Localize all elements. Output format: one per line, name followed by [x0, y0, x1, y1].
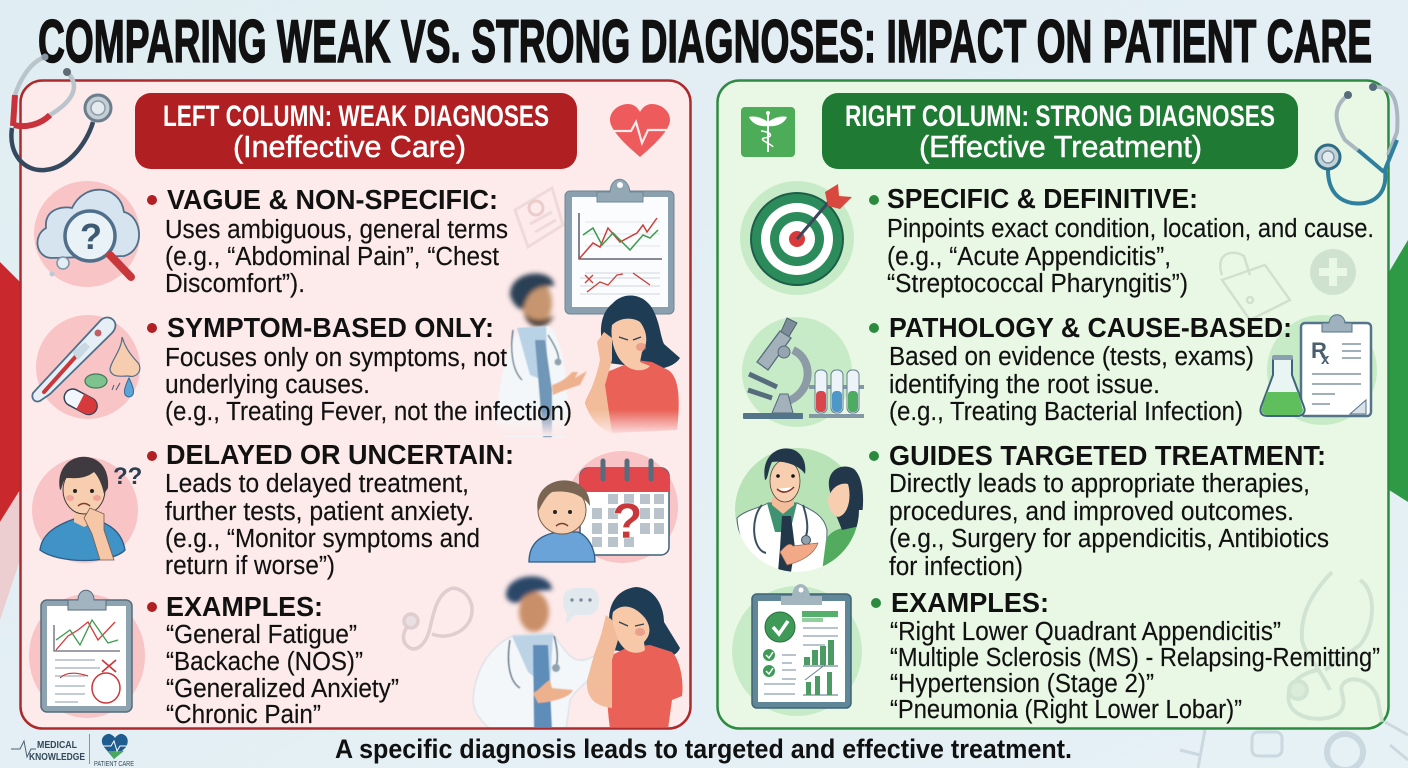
bullet: delayed or uncertain: return if worse”) — [165, 552, 335, 580]
bullet: vague and non-specific — [147, 184, 508, 298]
bullet: symptom-based only: SYMPTOM-BASED ONLY: — [167, 312, 494, 343]
icon: clipboard with marked charts — [29, 590, 145, 718]
bullet: symptom-based only: underlying causes. — [165, 371, 370, 399]
footer takeaway: A specific diagnosis leads to targeted and effective treatment. — [335, 734, 1072, 764]
icon: faint document — [515, 188, 563, 247]
bullet: guides targeted treatment: procedures, and improved outcomes. — [889, 498, 1294, 526]
header: strong diagnoses — [822, 93, 1298, 169]
icon: microscope and test tubes — [742, 317, 864, 427]
icon: worried boy with calendar — [529, 451, 678, 563]
bullet: strong examples: “Hypertension (Stage 2)” — [890, 670, 1154, 698]
logo: medical knowledge: MEDICAL — [37, 739, 77, 751]
panel: weak diagnoses — [20, 80, 690, 729]
bullet: specific and definitive: “Streptococcal Pharyngitis”) — [887, 270, 1188, 298]
bullet: specific and definitive: (e.g., “Acute Appendicitis”, — [887, 243, 1171, 271]
icon: stethoscope, top left — [11, 54, 111, 170]
illustration: blurred doctor with patient, lower — [473, 576, 683, 729]
header: weak diagnoses: (Ineffective Care) — [233, 130, 466, 164]
panel: strong diagnoses — [718, 80, 1397, 728]
icon: thermometer, nose and pills — [32, 315, 140, 419]
icon: clipboard with charts — [565, 179, 674, 314]
bullet: weak examples: EXAMPLES: — [166, 591, 323, 622]
header: weak diagnoses: LEFT COLUMN: WEAK DIAGNOSES — [163, 100, 549, 133]
header: weak diagnoses — [135, 93, 577, 169]
icon: cloud with magnifier — [34, 181, 140, 287]
icon: target and arrow — [740, 181, 854, 295]
bullet: pathology and cause-based: identifying the root issue. — [889, 371, 1160, 399]
bullet: strong examples — [871, 587, 1380, 724]
bullet: delayed or uncertain: Leads to delayed treatment, — [165, 470, 469, 498]
icon: faint lock and plus — [1220, 249, 1356, 320]
bullet: symptom-based only: Focuses only on symptoms, not — [165, 344, 507, 372]
bullet: specific and definitive: Pinpoints exact condition, location, and cause. — [887, 215, 1374, 243]
bullet: vague and non-specific: Uses ambiguous, general terms — [165, 216, 508, 244]
icon: caduceus — [741, 107, 795, 157]
icon: prescription clipboard and flask — [1260, 315, 1377, 425]
bullet: delayed or uncertain: DELAYED OR UNCERTAIN: — [166, 439, 514, 470]
bullet: strong examples: “Right Lower Quadrant Appendicitis” — [890, 618, 1281, 646]
bullet: symptom-based only — [147, 312, 572, 426]
bullet: guides targeted treatment: GUIDES TARGETED TREATMENT: — [889, 440, 1326, 471]
bullet: guides targeted treatment — [869, 440, 1329, 581]
bullet: delayed or uncertain — [147, 439, 514, 580]
icon: faint stethoscope — [403, 588, 472, 649]
logo: medical knowledge: KNOWLEDGE — [29, 751, 85, 763]
bullet: pathology and cause-based: PATHOLOGY & CAUSE-BASED: — [889, 312, 1292, 343]
bullet: delayed or uncertain: (e.g., “Monitor symptoms and — [165, 525, 480, 553]
bullet: pathology and cause-based — [869, 312, 1292, 426]
header: strong diagnoses: RIGHT COLUMN: STRONG DIAGNOSES — [845, 100, 1275, 133]
bullet: strong examples: EXAMPLES: — [891, 587, 1049, 618]
bullet: specific and definitive — [869, 183, 1374, 298]
bullet: guides targeted treatment: for infection) — [889, 553, 1023, 581]
icon: confused boy: ?? — [113, 463, 142, 490]
bullet: weak examples: “Chronic Pain” — [166, 701, 321, 729]
icon: prescription clipboard and flask: x — [1321, 351, 1330, 368]
icon: heart with pulse — [610, 104, 670, 157]
bullet: pathology and cause-based: (e.g., Treating Bacterial Infection) — [889, 398, 1243, 426]
header: strong diagnoses: (Effective Treatment) — [919, 130, 1202, 164]
bullet: weak examples: “Backache (NOS)” — [166, 648, 363, 676]
illustration: blurred doctor with patient — [490, 273, 685, 437]
icon: prescription clipboard and flask: R — [1311, 338, 1327, 363]
bullet: pathology and cause-based: Based on evidence (tests, exams) — [889, 343, 1254, 371]
bullet: weak examples: “Generalized Anxiety” — [166, 675, 399, 703]
bullet: symptom-based only: (e.g., Treating Fever, not the infection) — [165, 398, 572, 426]
icon: clipboard with check marks — [732, 584, 862, 716]
icon: smiling doctor with patient — [735, 448, 863, 575]
bullet: guides targeted treatment: (e.g., Surgery for appendicitis, Antibiotics — [889, 525, 1329, 553]
icon: faint stethoscope, bottom right — [1288, 572, 1382, 722]
bullet: vague and non-specific: VAGUE & NON-SPECIFIC: — [167, 184, 498, 215]
bullet: specific and definitive: SPECIFIC & DEFINITIVE: — [887, 183, 1198, 214]
icon: stethoscope, top right — [1316, 83, 1397, 203]
bullet: strong examples: “Pneumonia (Right Lower Lobar)” — [890, 696, 1242, 724]
bullet: delayed or uncertain: further tests, patient anxiety. — [165, 498, 474, 526]
icon: confused boy — [32, 457, 142, 563]
icon: cloud with magnifier: ? — [80, 216, 102, 257]
bullet: weak examples: “General Fatigue” — [166, 621, 357, 649]
logo: medical knowledge: PATIENT CARE — [94, 761, 134, 768]
bullet: vague and non-specific: Discomfort”). — [165, 270, 305, 298]
logo: medical knowledge — [11, 734, 134, 768]
bullet: vague and non-specific: (e.g., “Abdominal Pain”, “Chest — [165, 243, 499, 271]
icon: worried boy with calendar: ? — [612, 493, 643, 549]
bullet: guides targeted treatment: Directly leads to appropriate therapies, — [889, 470, 1310, 498]
bullet: weak examples — [147, 591, 399, 729]
bullet: strong examples: “Multiple Sclerosis (MS) - Relapsing-Remitting” — [890, 644, 1380, 672]
